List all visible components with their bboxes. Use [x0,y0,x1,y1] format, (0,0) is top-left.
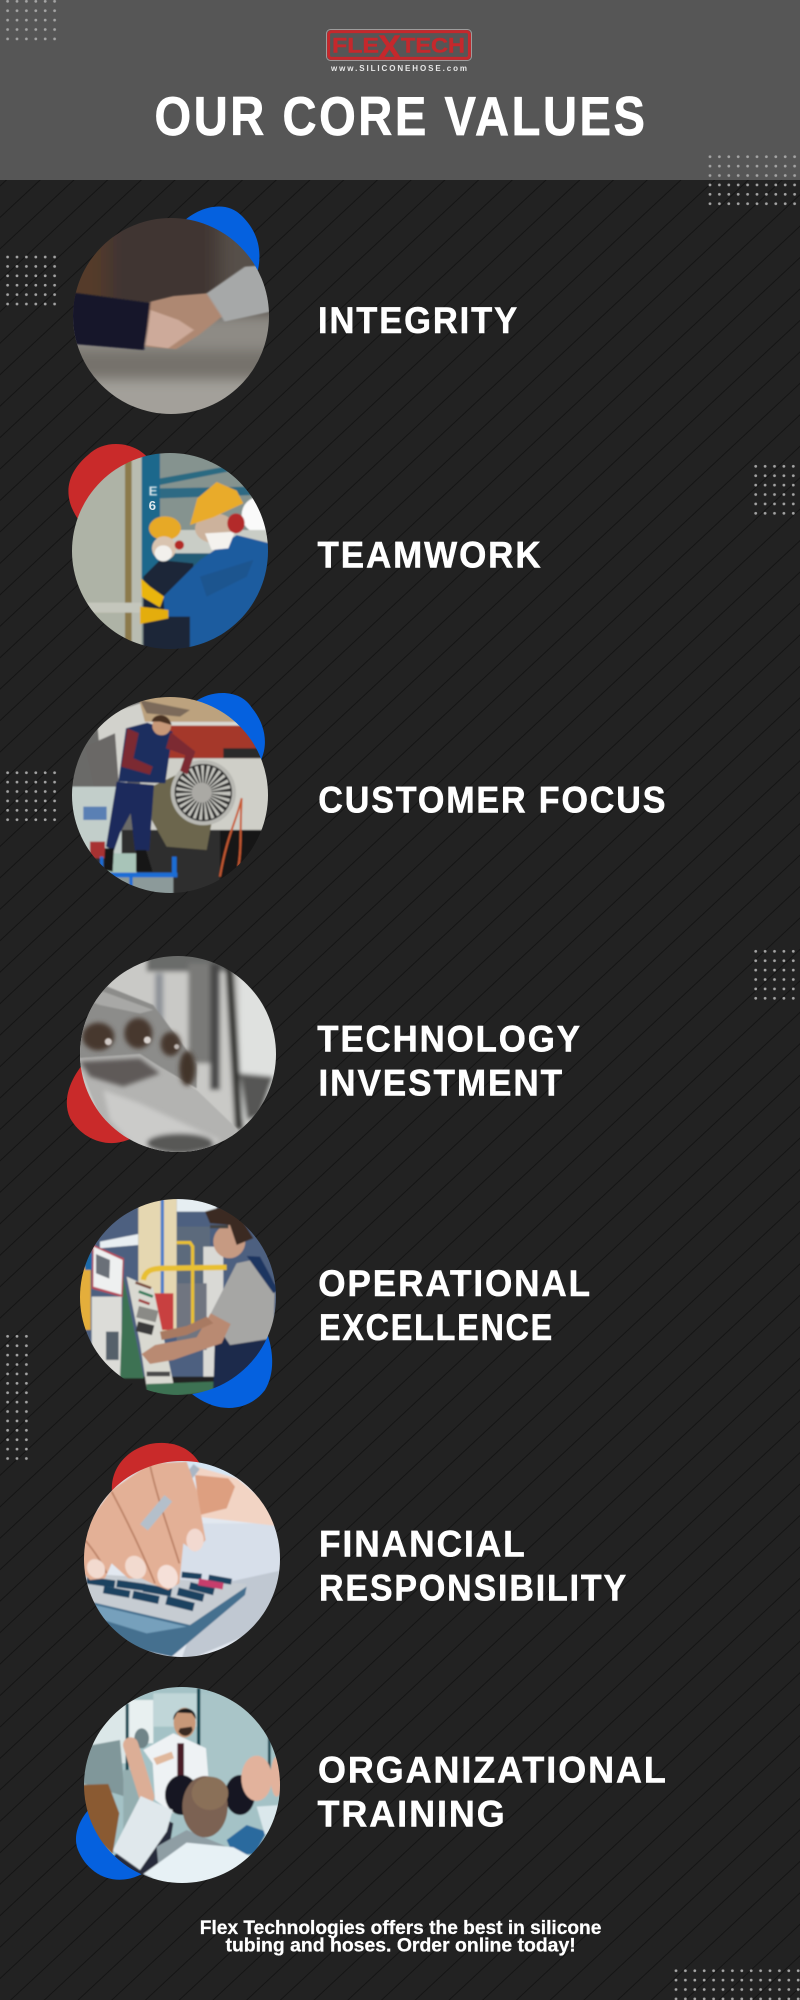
red blob accent [112,1443,200,1500]
logo: Flextech: X [378,29,402,65]
title: OUR CORE VALUES [154,85,648,147]
dot pattern: teamwork right [751,462,798,518]
footer call to action: Flex Technologies offers the best in silicone [200,1918,601,1939]
red blob accent [68,444,148,522]
photo: hand on calculator [84,1461,280,1657]
photo: machine bearing close-up [80,956,276,1152]
header band [0,0,800,180]
photo: handshake [73,218,269,414]
photo: trainer with audience [84,1687,280,1883]
photo: mechanic at jet engine [72,697,268,893]
dot pattern: header right [705,152,799,208]
label: RESPONSIBILITY [319,1568,628,1609]
label: TRAINING [318,1794,507,1835]
dot pattern: integrity left [3,252,59,309]
blue blob accent [192,1336,272,1408]
label: TEAMWORK [318,534,542,575]
value: integrity [73,206,517,414]
footer call to action: tubing and hoses. Order online today! [226,1936,576,1957]
photo: workers in hard hats [72,453,268,649]
red blob accent [67,1064,132,1143]
logo: Flextech [326,29,472,73]
label [318,1263,592,1348]
label [318,1750,668,1835]
label: CUSTOMER FOCUS [318,780,667,821]
value: teamwork [67,444,542,653]
label [317,1019,582,1104]
label: INVESTMENT [318,1063,564,1104]
label: INTEGRITY [318,300,519,341]
blue blob accent [180,206,259,270]
label [319,1524,628,1609]
dot pattern: technology right [751,947,798,1003]
value: customer focus [67,692,667,898]
value: operational excellence [73,1193,592,1408]
value: financial responsibility [77,1443,628,1663]
blue blob accent [76,1806,142,1880]
value: technology investment [66,956,580,1152]
logo: Flextech: www.SILICONEHOSE.com [330,64,467,73]
E6 marking: E [149,483,158,498]
footer call to action [200,1918,601,1957]
photo: operator at control panel [80,1199,276,1395]
dot pattern: customer focus left [3,768,59,824]
value: organizational training [76,1680,668,1890]
label: TECHNOLOGY [317,1019,582,1060]
label: FINANCIAL [319,1524,527,1565]
label: OPERATIONAL [318,1263,592,1304]
dot pattern: tall left column [3,1332,31,1463]
logo: Flextech: FLE [332,34,379,58]
blue blob accent [195,693,265,760]
logo: Flextech: TECH [401,34,465,58]
photo: workers in hard hats: 6 [149,498,156,513]
dot pattern: bottom right [671,1966,800,2000]
label: EXCELLENCE [319,1307,554,1348]
dot pattern: header top left [3,0,59,44]
label: ORGANIZATIONAL [318,1750,668,1791]
